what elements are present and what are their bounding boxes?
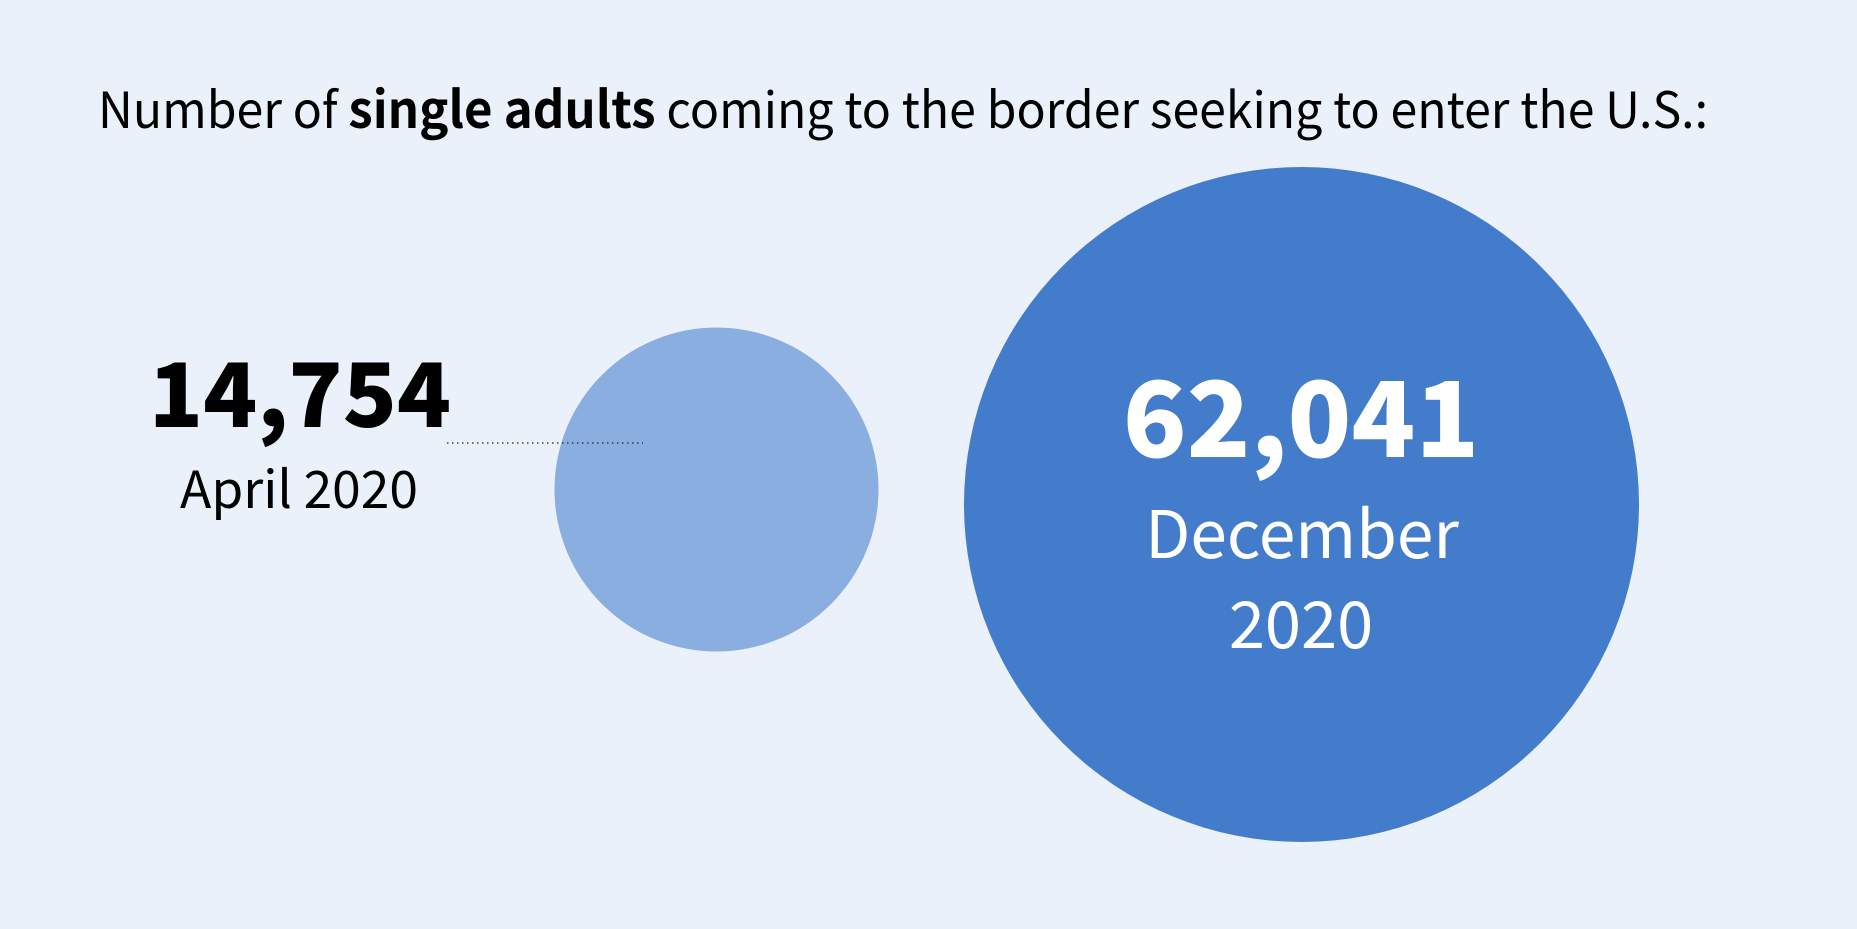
title: Number of single adults coming to the border seeking to enter the U.S.: — [98, 69, 1708, 143]
label: December 2020 value — [1123, 336, 1479, 667]
number: 62,041: 62,041 — [1123, 336, 1479, 488]
date: April 2020: April 2020 — [180, 448, 418, 523]
label: April 2020 value — [149, 324, 451, 523]
date: 2020: 2020 — [1229, 573, 1373, 667]
number: 14,754: 14,754 — [149, 324, 451, 453]
leader line — [447, 442, 643, 444]
circle: December 2020 — [964, 167, 1639, 842]
circle: April 2020 — [554, 328, 878, 652]
date: December: December — [1145, 482, 1459, 577]
